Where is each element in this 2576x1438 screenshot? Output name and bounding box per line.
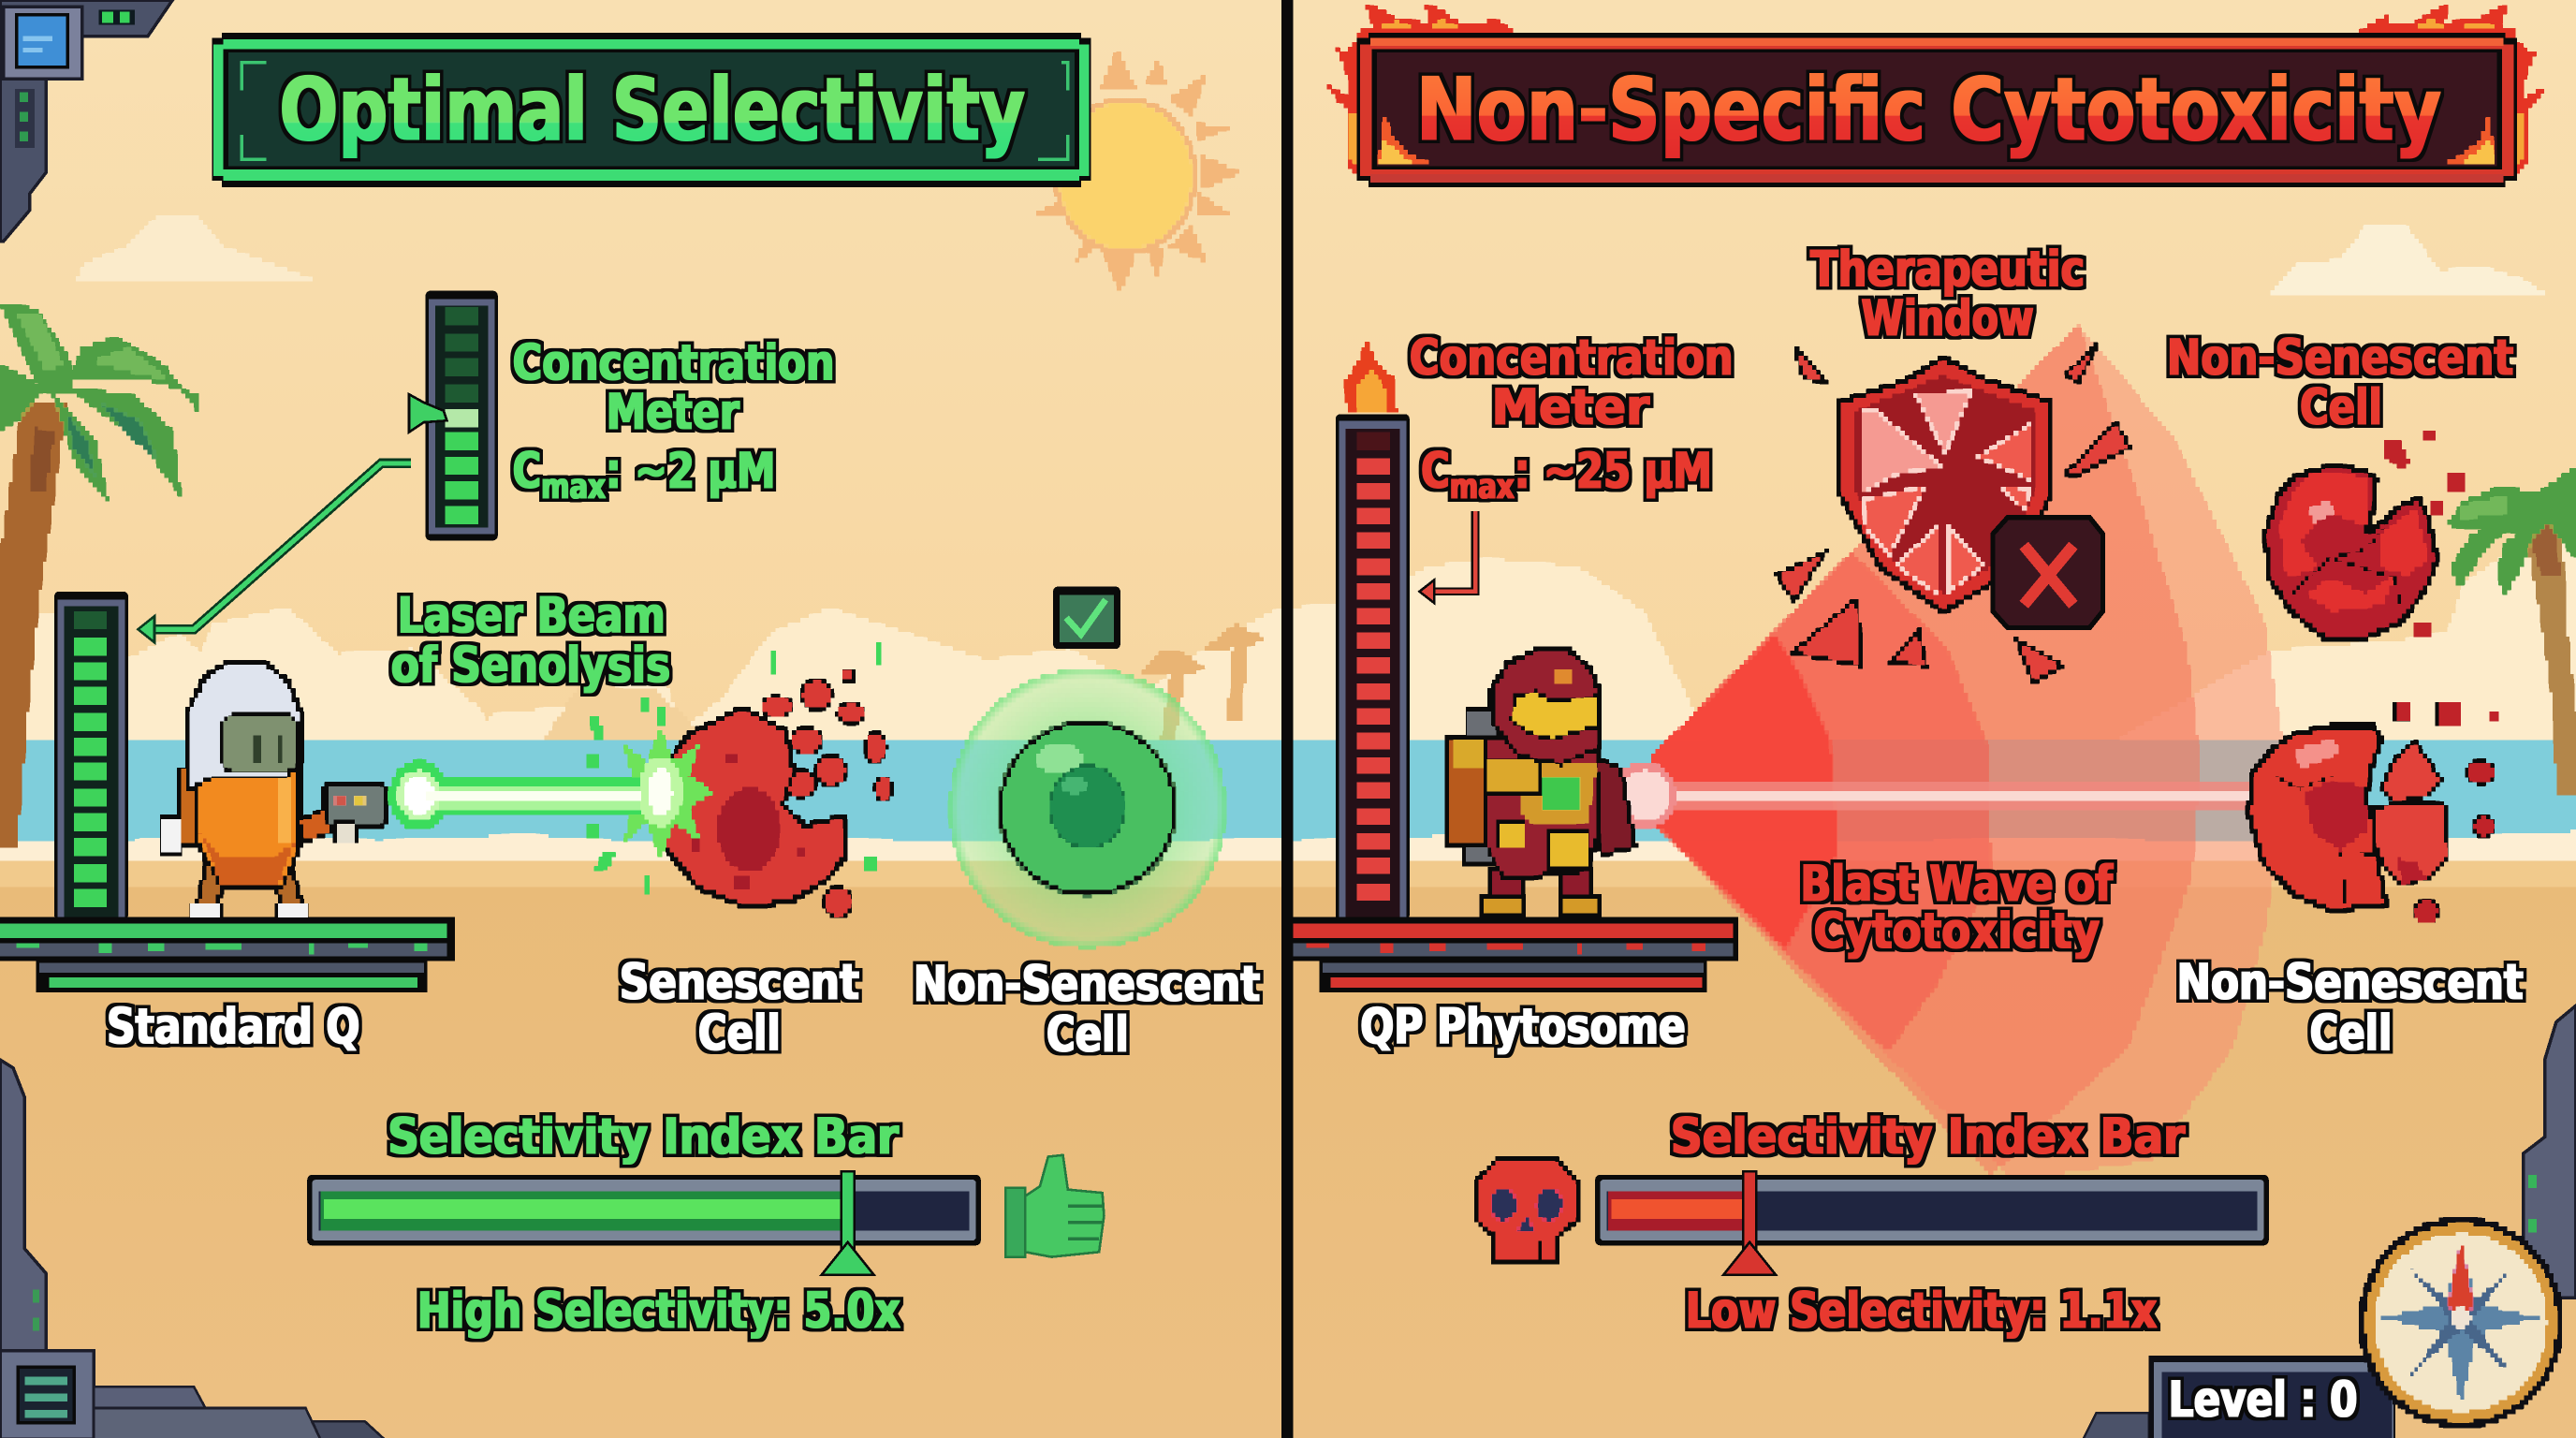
cracked cell: top <box>2265 431 2466 638</box>
labels: actors: Standard Q <box>107 998 359 1055</box>
labels: actors: Cell <box>698 1005 781 1062</box>
labels: actors right: Cell <box>2310 1005 2392 1062</box>
hud corner: bottom right <box>2083 1005 2576 1438</box>
label: concentration meter: max <box>541 466 606 506</box>
label: non-senescent top: Cell <box>2300 379 2382 436</box>
backpack <box>179 769 198 844</box>
selectivity index: high: High Selectivity: 5.0x <box>417 1283 900 1340</box>
labels: actors: Non-Senescent <box>914 956 1260 1013</box>
selectivity index: low: Selectivity Index Bar <box>1671 1108 2185 1166</box>
label: blast wave: Cytotoxicity <box>1814 903 2100 961</box>
bar <box>307 1175 981 1245</box>
right distant clouds <box>1293 559 1708 740</box>
helmet <box>1492 651 1599 764</box>
selectivity index: low: Low Selectivity: 1.1x <box>1686 1283 2157 1340</box>
hud corner: bottom right: Level : 0 <box>2169 1372 2358 1429</box>
shield shards <box>1778 345 2130 682</box>
labels: actors right <box>1360 954 2524 1062</box>
label: non-senescent top: Non-Senescent <box>2167 330 2513 387</box>
concentration meter: high with flame <box>1336 342 1410 920</box>
hud corner: bottom left <box>0 1060 385 1438</box>
panel: optimal selectivity <box>0 0 1260 1438</box>
check badge <box>1053 587 1120 649</box>
bar <box>1595 1175 2269 1245</box>
character: standard q capsule <box>161 662 385 917</box>
marker <box>1723 1171 1776 1275</box>
label: non-senescent top <box>2167 330 2513 436</box>
palm tree <box>0 302 198 848</box>
label: concentration meter high: C <box>1421 443 1457 500</box>
labels: actors <box>107 954 1260 1064</box>
sky clouds <box>78 213 313 279</box>
cracked cell: bottom <box>2249 703 2498 923</box>
selectivity index: low <box>1475 1108 2269 1340</box>
center divider <box>1281 0 1293 1438</box>
arrow: meter link <box>138 463 411 642</box>
label: blast wave: Blast Wave of <box>1801 856 2114 913</box>
label: concentration meter high: Concentration <box>1410 330 1734 387</box>
label: concentration meter high: max <box>1450 466 1515 506</box>
selectivity index: high: Selectivity Index Bar <box>388 1108 899 1166</box>
labels: actors: Senescent <box>620 954 859 1011</box>
distant palms <box>1142 651 1212 740</box>
concentration meter: upper <box>426 291 498 540</box>
icon: x badge <box>1993 518 2102 627</box>
body <box>194 764 299 888</box>
arm <box>161 816 181 853</box>
torso <box>1486 740 1597 879</box>
label: concentration meter <box>513 334 835 506</box>
senescent cell <box>661 670 892 917</box>
character: qp phytosome armored <box>1447 651 1634 917</box>
label: concentration meter high: : ~25 μM <box>1515 443 1712 500</box>
label: laser beam: Laser Beam <box>398 588 666 645</box>
non-senescent cell with shield bubble <box>949 668 1225 948</box>
label: concentration meter: Concentration <box>513 334 835 391</box>
legs <box>1484 871 1600 917</box>
helmet <box>189 662 300 788</box>
ray gun <box>326 785 385 825</box>
platform: standard q <box>0 917 455 992</box>
labels: actors: Cell <box>1046 1006 1129 1064</box>
title banner: Optimal Selectivity <box>279 59 1025 160</box>
label: concentration meter: C <box>513 443 549 500</box>
label: concentration meter high <box>1410 330 1734 506</box>
label: blast wave <box>1801 856 2114 961</box>
label: therapeutic window: Window <box>1862 290 2034 347</box>
concentration meter: lower <box>54 592 128 920</box>
blast wave cone <box>1651 325 2282 1177</box>
icon: compass <box>2359 1217 2563 1428</box>
arrow: meter link high <box>1419 511 1475 603</box>
palm tree: right <box>2446 466 2576 794</box>
sun <box>1035 50 1240 292</box>
label: laser beam: of Senolysis <box>391 637 670 694</box>
marker <box>822 1171 874 1275</box>
label: therapeutic window <box>1810 241 2085 347</box>
left distant clouds <box>0 611 279 740</box>
blast beam <box>1613 762 2254 829</box>
label: concentration meter: : ~2 μM <box>606 443 775 500</box>
meter pointer <box>409 394 446 433</box>
hud corner: top left <box>0 0 172 242</box>
panel: non-specific cytotoxicity <box>1293 7 2576 1438</box>
title banner with flames <box>1327 7 2546 187</box>
label: concentration meter: Meter <box>607 384 739 441</box>
label: therapeutic window: Therapeutic <box>1810 241 2085 298</box>
platform: qp phytosome <box>1293 917 1738 992</box>
legs <box>198 862 302 909</box>
label: concentration meter high: Meter <box>1492 379 1649 436</box>
icon: cracked shield <box>1840 359 2050 611</box>
selectivity index: high <box>307 1108 1104 1340</box>
title banner <box>212 33 1090 187</box>
labels: actors right: QP Phytosome <box>1360 998 1686 1055</box>
label: laser beam <box>391 588 670 694</box>
laser beam <box>389 644 883 894</box>
icon: skull <box>1475 1158 1577 1262</box>
icon: thumbs up <box>1005 1155 1104 1257</box>
